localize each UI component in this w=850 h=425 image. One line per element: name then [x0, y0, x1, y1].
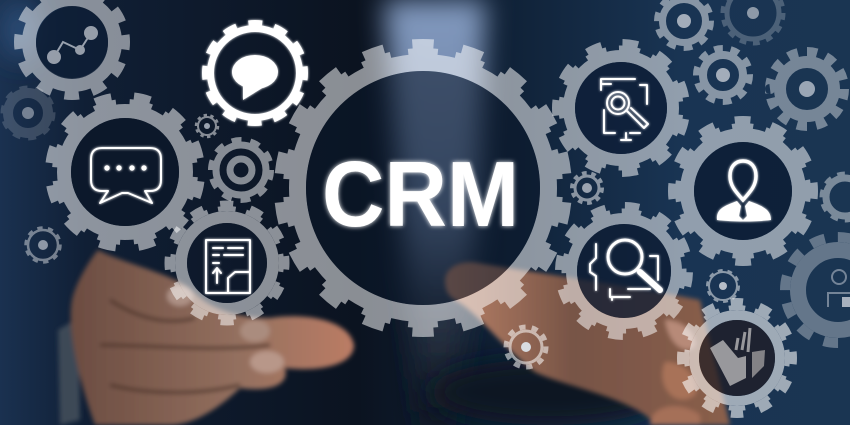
gear: search	[559, 206, 689, 336]
gear: tiny lower middle	[708, 270, 738, 302]
gear: tiny upper	[196, 115, 218, 137]
gear: mid	[211, 140, 271, 200]
right hand	[445, 262, 730, 425]
gear: speech bubble, white	[206, 24, 304, 122]
title: CRM: CRM	[322, 142, 519, 246]
gear: small dark left	[3, 88, 53, 138]
icon: search	[590, 240, 660, 300]
gear: far right light	[770, 52, 844, 126]
gear: upper right small	[696, 48, 750, 102]
gear: small lower left	[26, 228, 60, 262]
gear: document search	[556, 43, 686, 173]
gear: document	[168, 204, 286, 322]
gear: tiny on hand	[506, 327, 546, 367]
gear: central CRM	[279, 44, 567, 332]
gear: check hand	[682, 302, 792, 414]
gear: faint person lock	[785, 237, 850, 343]
icon: line graph	[47, 26, 98, 64]
gear: top right one	[657, 0, 711, 48]
gear: person	[672, 120, 814, 262]
gear: line graph	[19, 0, 125, 95]
icon: person	[717, 161, 771, 222]
icon: speech bubble	[232, 55, 278, 100]
gear: tiny middle right	[572, 173, 602, 203]
icon: document search	[601, 79, 648, 140]
icon: document	[206, 240, 250, 293]
icon: chat dots	[91, 148, 161, 203]
gear: right edge	[822, 174, 850, 220]
gear: chat dots	[49, 96, 201, 248]
left hand	[58, 250, 354, 425]
icon: check hand	[710, 328, 765, 386]
gear: top right two	[723, 0, 783, 43]
